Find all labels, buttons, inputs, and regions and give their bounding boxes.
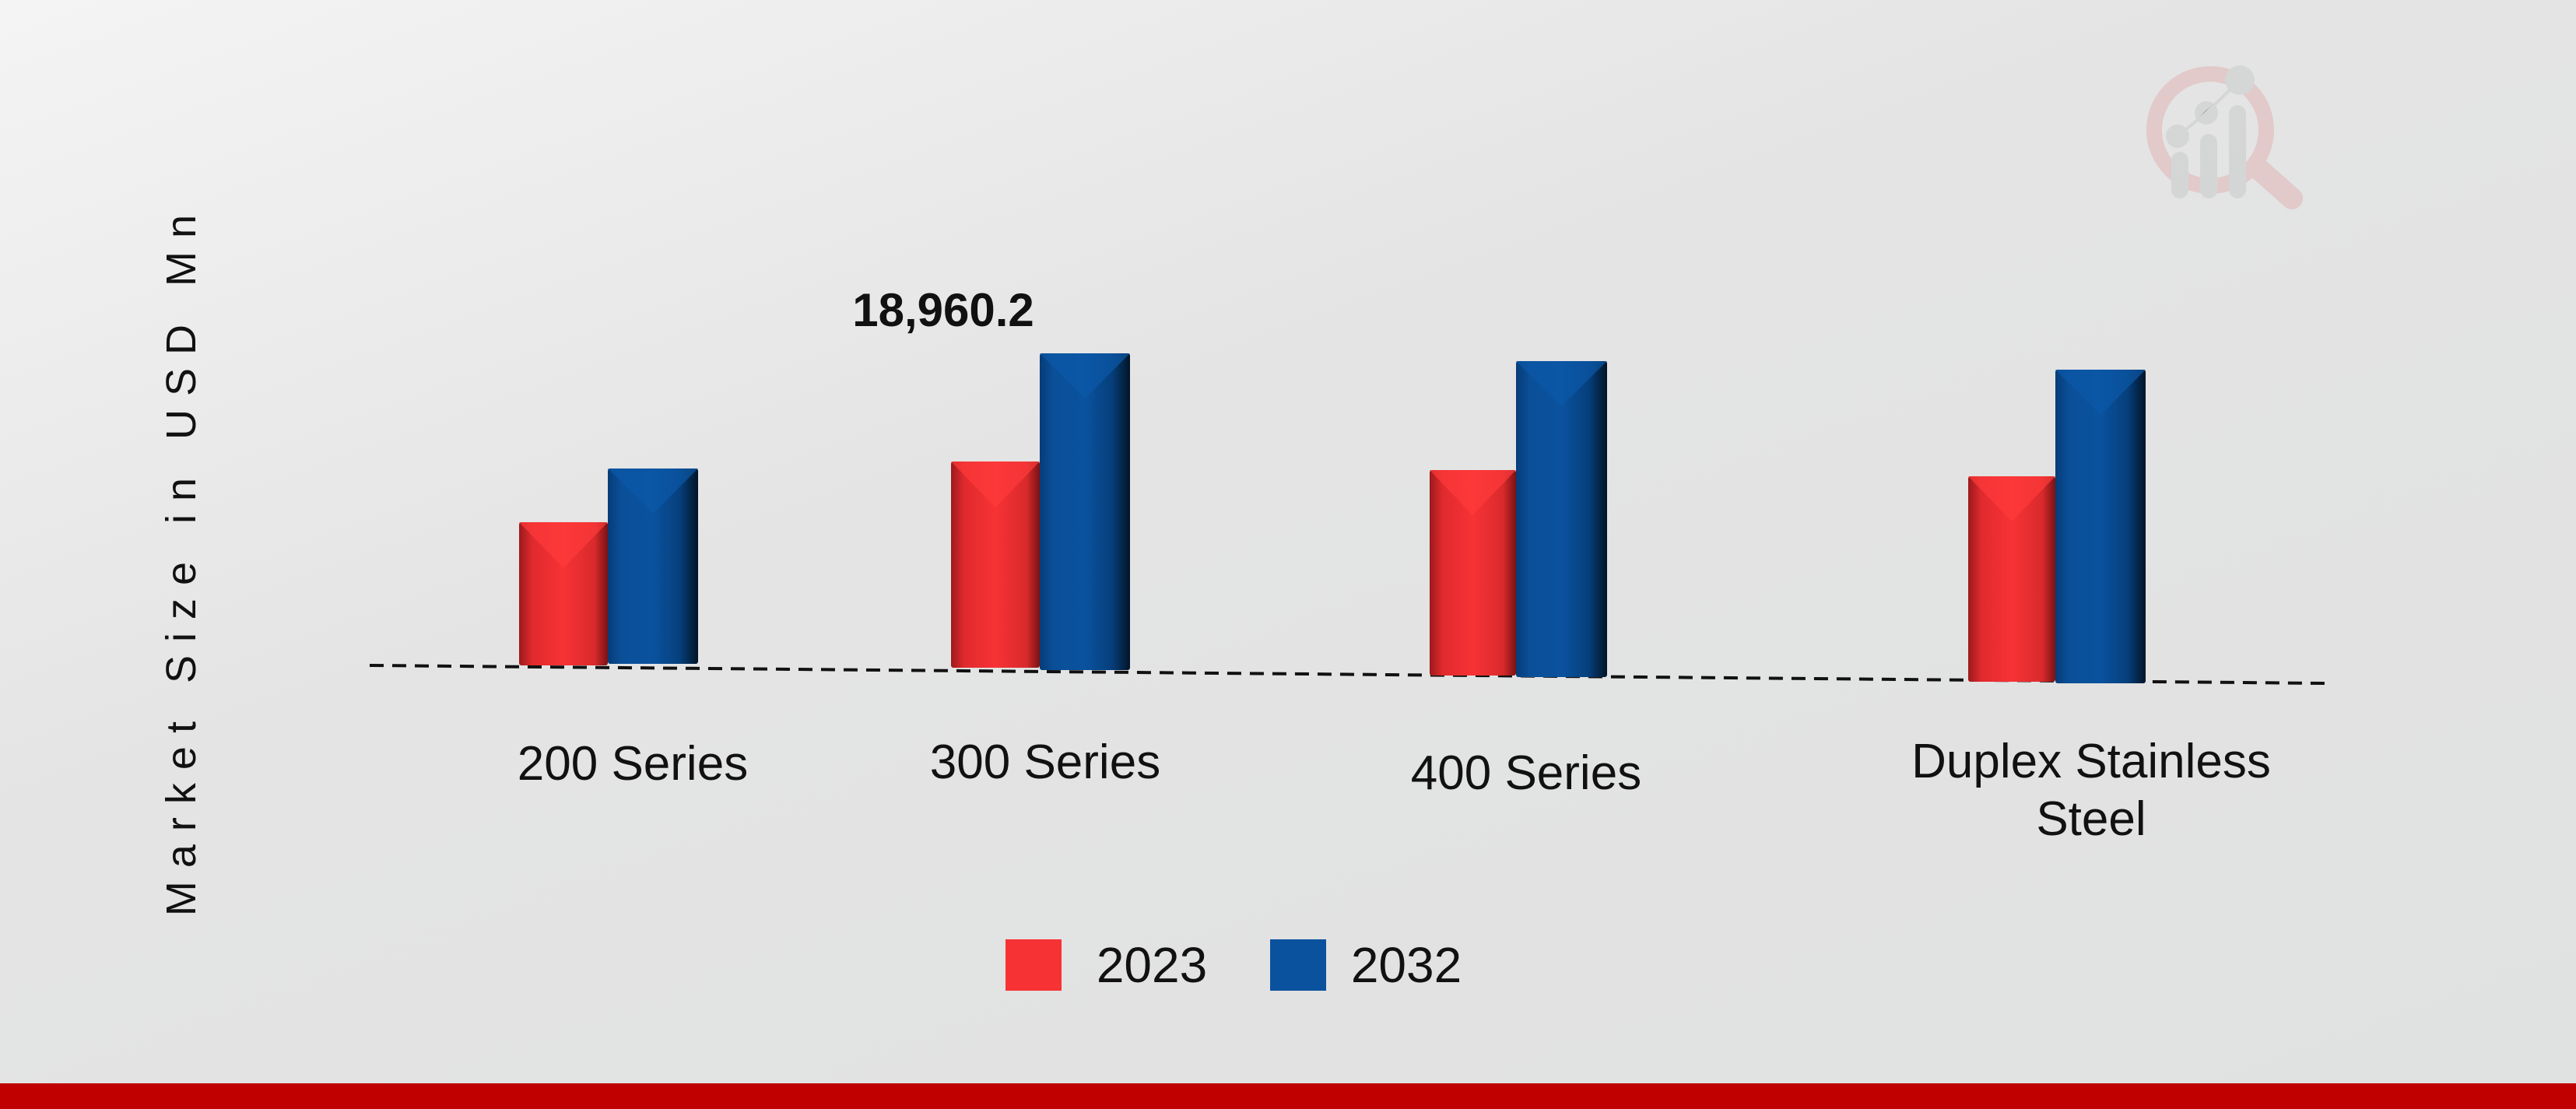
text: 2032 — [1351, 937, 1462, 993]
bars: 300 Series — [951, 353, 1130, 670]
icon: logo watermark — [2154, 65, 2292, 198]
legend labels: 2023 — [1097, 937, 1207, 993]
y axis label: Market Size in USD Mn — [158, 202, 205, 916]
legend swatches — [1005, 939, 1326, 991]
text: 300 Series — [930, 735, 1160, 789]
text: 400 Series — [1411, 746, 1641, 800]
text: Duplex Stainless — [1911, 735, 2271, 788]
text: Steel — [2036, 792, 2146, 846]
bars: Duplex Stainless Steel — [1968, 370, 2146, 683]
bars: 400 Series — [1430, 361, 1607, 677]
dashed baseline — [370, 665, 2325, 683]
value label: 18,960.2 — [852, 284, 1034, 336]
category labels: 200 Series — [518, 737, 748, 791]
bars: 200 Series — [519, 469, 698, 665]
bottom red band — [0, 1083, 2576, 1109]
